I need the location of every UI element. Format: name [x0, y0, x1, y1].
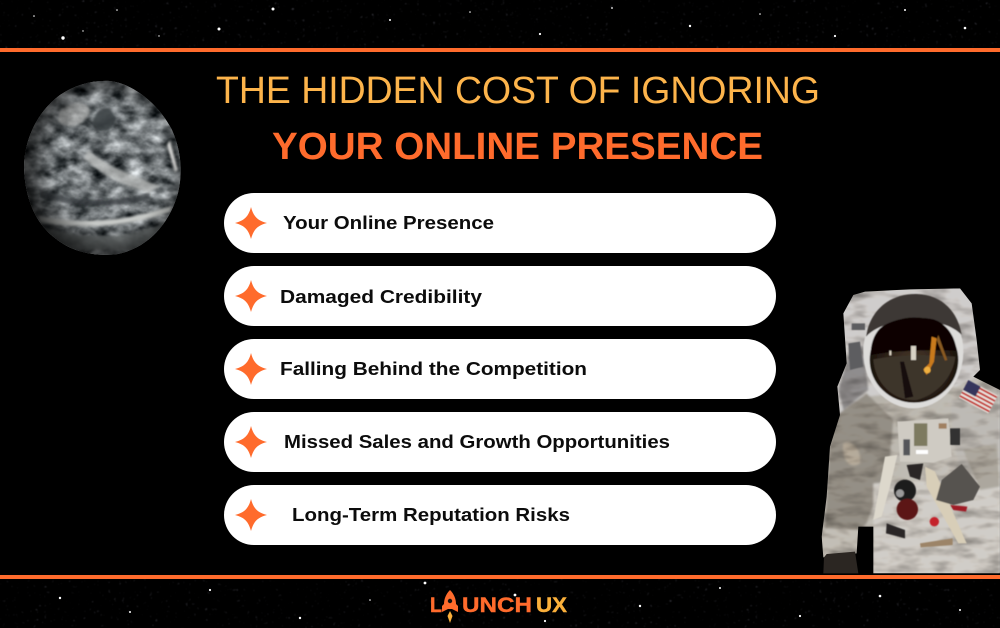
logo: LaunchUX: L: [430, 594, 442, 617]
suit folds texture: [810, 280, 1000, 573]
logo: LaunchUX: UX: [536, 594, 567, 617]
star field: bottom band: [0, 579, 1000, 628]
icon: rocket: [442, 590, 458, 623]
straps: [873, 455, 897, 520]
oxygen connectors: [894, 480, 916, 502]
logo: LaunchUX: UNCH: [462, 594, 532, 617]
logo: LaunchUX: [430, 590, 567, 623]
top orange rule: [0, 48, 1000, 52]
icon: star: [235, 207, 267, 239]
backpack and shoulders: [834, 285, 983, 417]
list item 3: [224, 339, 776, 399]
list item 4: Missed Sales and Growth Opportunities: [284, 431, 670, 452]
list item 2: Damaged Credibility: [280, 286, 483, 307]
helmet: [863, 294, 963, 408]
torso: [873, 477, 1000, 573]
astronaut: [810, 280, 1000, 573]
title: [216, 70, 820, 168]
chest control unit: [897, 418, 952, 463]
list item 5: [224, 485, 776, 545]
list item 1: Your Online Presence: [283, 212, 494, 233]
title line 1: THE HIDDEN COST OF IGNORING: [216, 70, 820, 112]
glove: [936, 464, 980, 505]
star field: top band: [0, 0, 1000, 48]
icon: star: [235, 426, 267, 458]
list item 4: [224, 412, 776, 472]
planet earth photo: [20, 78, 186, 258]
icon: star: [235, 280, 267, 312]
bottom orange rule: [0, 575, 1000, 579]
list item 5: Long-Term Reputation Risks: [292, 504, 570, 525]
icon: star: [235, 353, 267, 385]
visor reflection: [870, 317, 958, 403]
cuff: [827, 528, 858, 534]
flag: [959, 380, 998, 413]
list item 2: [224, 266, 776, 326]
list item 1: [224, 193, 776, 253]
list item 3: Falling Behind the Competition: [280, 358, 587, 379]
icon: star: [235, 499, 267, 531]
title line 2: YOUR ONLINE PRESENCE: [272, 126, 763, 168]
arm shading: [825, 393, 893, 533]
lower arm glove: [823, 552, 858, 573]
